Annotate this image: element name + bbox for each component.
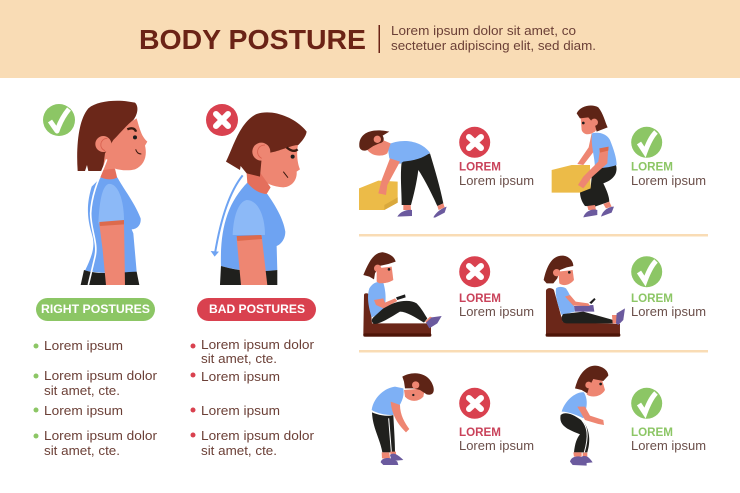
- list: right postures: Lorem ipsum: [44, 338, 123, 353]
- list: bad postures: [190, 337, 315, 458]
- list: right postures: sit amet, cte.: [44, 383, 120, 398]
- label: row 1 bad: LOREM: [459, 160, 501, 174]
- icon: green check row 3: [631, 388, 662, 419]
- label: row 1 good: LOREM: [631, 160, 673, 174]
- title: BODY POSTURE: [139, 24, 366, 55]
- label: row 3 good: LOREM: [631, 425, 673, 439]
- header band: [0, 0, 740, 78]
- list: right postures: sit amet, cte.: [44, 443, 120, 458]
- icon: green check row 2: [631, 256, 662, 287]
- header description: sectetuer adipiscing elit, sed diam.: [391, 38, 596, 53]
- pill: bad postures: [197, 298, 316, 321]
- list: bad postures: Lorem ipsum: [201, 403, 280, 418]
- figure: right posture: [77, 101, 147, 285]
- label: row 1 bad: Lorem ipsum: [459, 173, 534, 188]
- pill: right postures: RIGHT POSTURES: [41, 302, 150, 316]
- label: row 3 bad: [459, 425, 534, 453]
- label: row 2 good: [631, 291, 706, 319]
- icon: red cross row 3: [459, 388, 490, 419]
- label: row 3 bad: Lorem ipsum: [459, 438, 534, 453]
- list: right postures: Lorem ipsum: [44, 403, 123, 418]
- list: right postures: Lorem ipsum dolor: [44, 428, 158, 443]
- pill: right postures: [36, 298, 155, 321]
- label: row 3 good: [631, 425, 706, 453]
- icon: red cross row 1: [459, 127, 490, 158]
- figure: good lifting: [552, 105, 617, 217]
- label: row 2 good: Lorem ipsum: [631, 304, 706, 319]
- figure: bad posture: [211, 112, 307, 285]
- label: row 1 good: [631, 160, 706, 188]
- list: right postures: [34, 338, 158, 458]
- pill: bad postures: BAD POSTURES: [209, 302, 305, 316]
- label: row 3 bad: LOREM: [459, 425, 501, 439]
- icon: red cross row 2: [459, 256, 490, 287]
- list: bad postures: sit amet, cte.: [201, 351, 277, 366]
- list: bad postures: sit amet, cte.: [201, 443, 277, 458]
- icon: red cross: [206, 104, 238, 136]
- label: row 1 good: Lorem ipsum: [631, 173, 706, 188]
- list: bad postures: Lorem ipsum: [201, 369, 280, 384]
- label: row 2 bad: LOREM: [459, 291, 501, 305]
- figure: bad standing: [372, 373, 434, 465]
- figure: bad sitting: [363, 252, 442, 337]
- label: row 2 bad: Lorem ipsum: [459, 304, 534, 319]
- list: bad postures: Lorem ipsum dolor: [201, 337, 315, 352]
- figure: good standing: [560, 366, 608, 466]
- list: right postures: Lorem ipsum dolor: [44, 368, 158, 383]
- header description: Lorem ipsum dolor sit amet, co: [391, 23, 576, 38]
- icon: green check row 1: [631, 127, 662, 158]
- figure: bad lifting: [359, 130, 447, 218]
- list: bad postures: Lorem ipsum dolor: [201, 428, 315, 443]
- figure: good sitting: [544, 256, 625, 337]
- icon: green check: [43, 104, 75, 136]
- label: row 2 bad: [459, 291, 534, 319]
- label: row 3 good: Lorem ipsum: [631, 438, 706, 453]
- label: row 2 good: LOREM: [631, 291, 673, 305]
- label: row 1 bad: [459, 160, 534, 188]
